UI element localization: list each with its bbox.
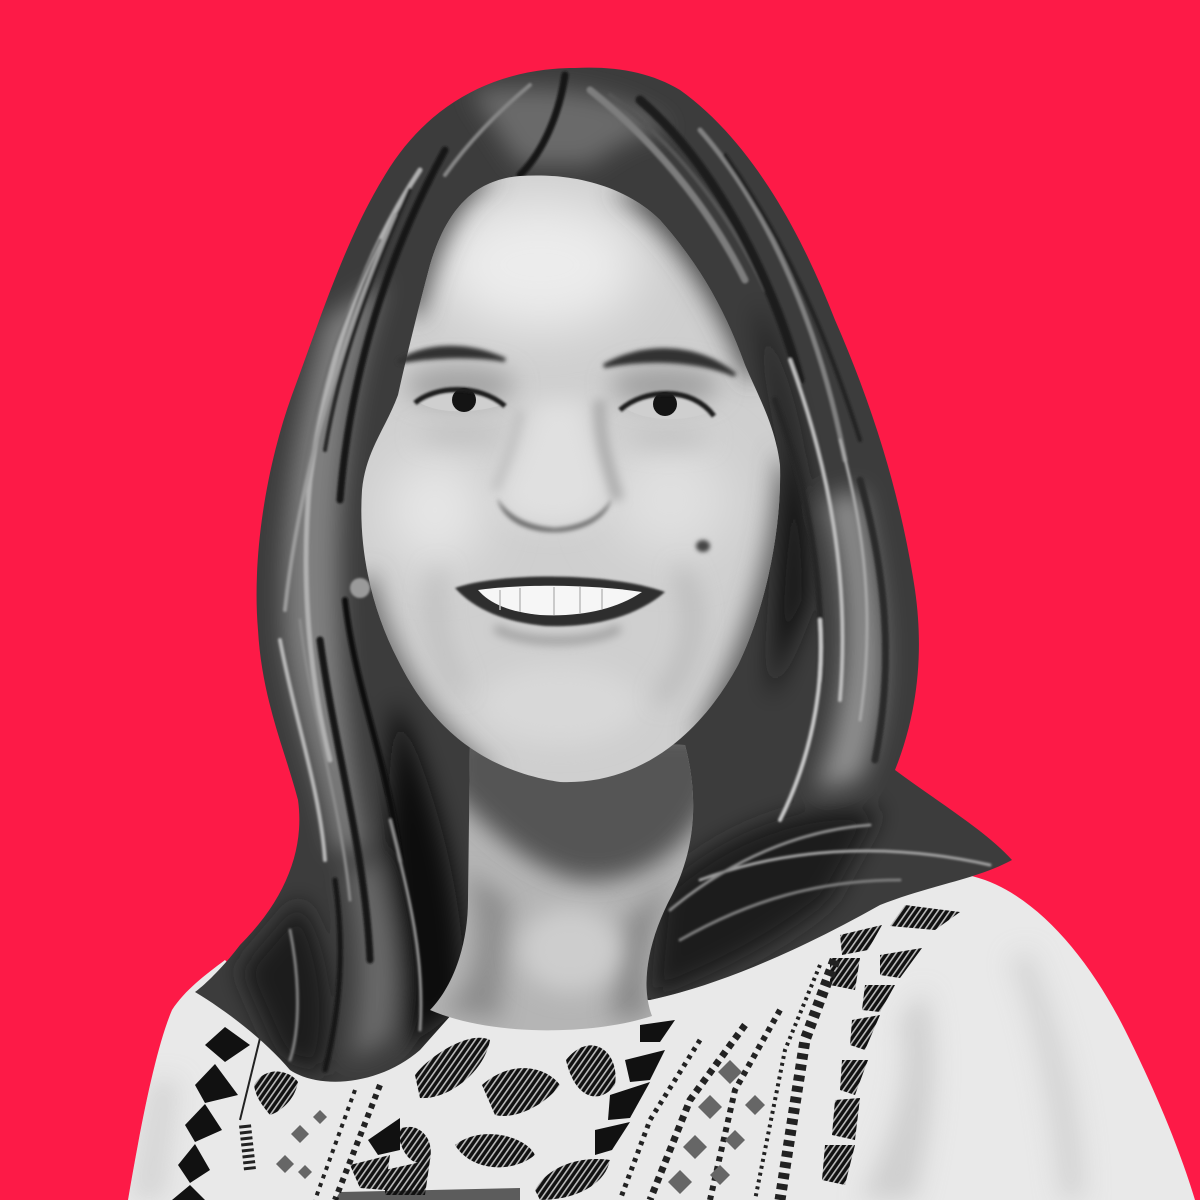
embroidery: vertical bands [240,960,835,1200]
embroidery: flowers and leaves [254,1038,616,1200]
eye socket shading [405,365,515,405]
mouth [455,576,665,641]
eye left [415,388,505,412]
eye right [620,392,714,419]
nose [495,400,618,532]
forehead highlight [440,200,640,330]
blouse [128,872,1195,1200]
cheek highlights [385,455,485,565]
eyebrow right [604,350,735,375]
hair silhouette [195,68,1012,1082]
embroidery: shoulder band [822,905,960,1185]
hair shading and strands [240,75,990,1075]
face [345,170,805,782]
face edge shading [366,564,502,765]
smile lines [435,570,460,690]
embroidery: diamonds [276,1060,765,1194]
eyebrow left [398,348,505,362]
earring [350,578,370,598]
blouse folds [130,950,1085,1200]
mole [696,540,710,552]
neck [430,744,694,1030]
